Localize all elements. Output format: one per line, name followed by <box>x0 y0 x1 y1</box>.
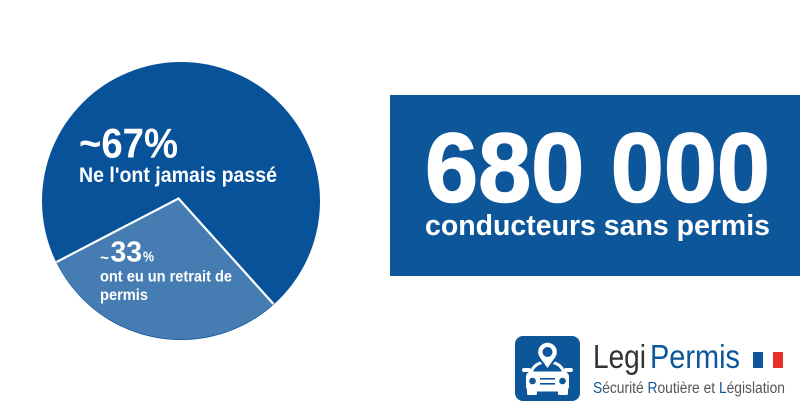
key number: 680 000 <box>425 112 770 222</box>
panel: key figure <box>390 95 800 276</box>
pie slice: 67% <box>42 62 320 340</box>
slice separator <box>56 198 274 304</box>
icon: car with map pin <box>515 336 580 401</box>
pie chart <box>42 62 320 340</box>
logo wordmark <box>593 338 740 375</box>
label: licence withdrawn: permis <box>100 287 148 304</box>
wordmark: Permis: Permis <box>650 338 740 375</box>
logo: LegiPermis <box>515 336 785 401</box>
icon: French flag <box>753 352 783 368</box>
label: never passed: Ne l'ont jamais passé <box>79 164 277 187</box>
label: 67%: ~67% <box>79 120 178 166</box>
key figure caption: conducteurs sans permis <box>425 210 770 242</box>
wordmark: Legi: Legi <box>593 338 646 375</box>
pie slice: 33% <box>56 198 274 339</box>
label: licence withdrawn: ont eu un retrait de <box>100 268 232 286</box>
logo tagline: Sécurité Routière et Législation <box>593 380 785 397</box>
number 33: 33 <box>110 236 142 268</box>
tilde: ~ <box>100 250 109 267</box>
label: 33% <box>100 236 154 268</box>
percent sign: % <box>143 248 154 266</box>
panel background <box>390 95 800 276</box>
